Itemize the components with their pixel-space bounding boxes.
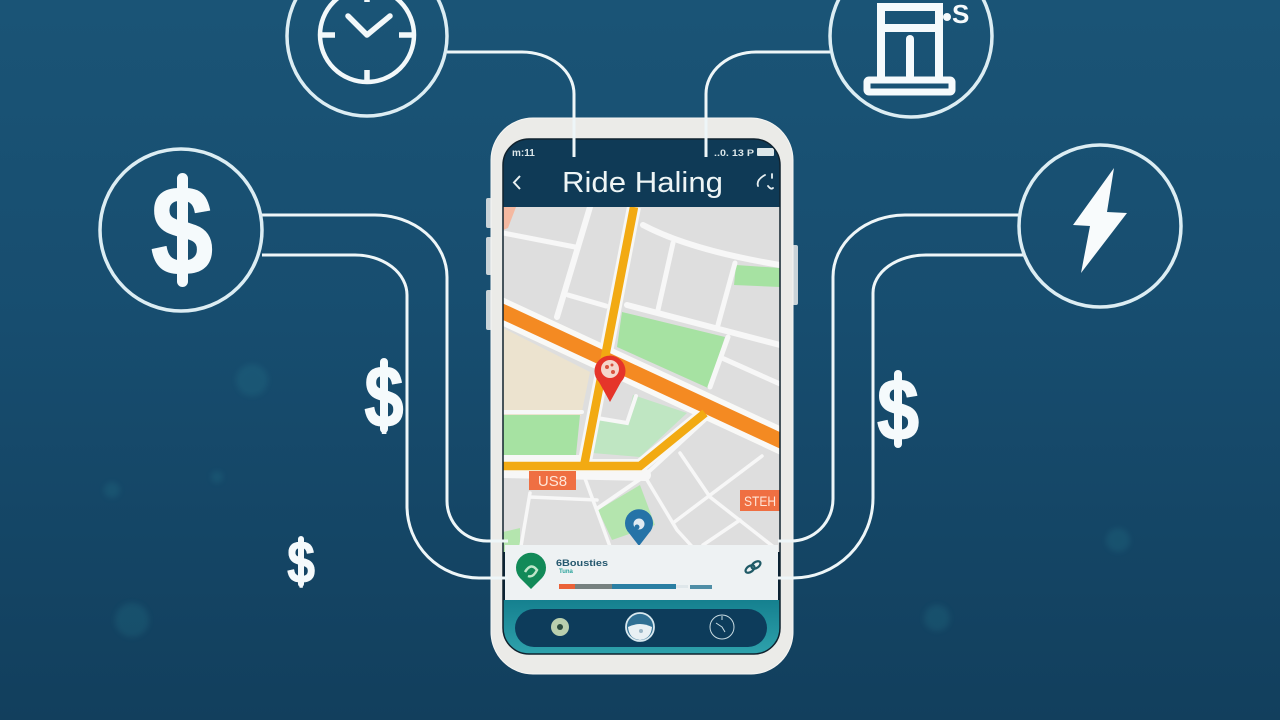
card subtitle: Tuna xyxy=(559,569,574,575)
map xyxy=(495,207,790,552)
beige block xyxy=(503,328,590,416)
connector: clock to phone xyxy=(447,52,574,157)
status bar left: m:11 xyxy=(512,148,535,159)
floating dollar left small: $ xyxy=(287,529,315,596)
status bar right: ..0. 13 P xyxy=(714,148,754,158)
yellow route casing xyxy=(503,207,705,466)
app title: Ride Haling xyxy=(562,167,723,199)
icon: nav left xyxy=(551,618,569,636)
info card xyxy=(505,545,778,605)
status bar right xyxy=(714,148,774,156)
phone xyxy=(486,118,798,674)
connector: bolt outer xyxy=(778,215,1020,541)
icon: nav center xyxy=(626,613,654,641)
street label left xyxy=(529,471,576,490)
icon: nav right xyxy=(710,615,734,639)
phone side buttons xyxy=(486,198,798,330)
green parks xyxy=(503,207,780,552)
icon: red map pin xyxy=(594,356,626,402)
icon: blue map pin xyxy=(625,509,653,546)
icon: dollar circle xyxy=(100,149,262,311)
icon: lightning bolt circle xyxy=(1019,145,1181,307)
screen edge xyxy=(503,139,780,654)
white streets xyxy=(503,207,780,552)
card title: 6Bousties xyxy=(556,558,608,569)
yellow route xyxy=(503,207,705,466)
orange main road xyxy=(495,308,790,445)
bottom navigation xyxy=(503,600,780,656)
icon: dollar circle: $ xyxy=(151,159,213,303)
phone screen xyxy=(495,137,790,656)
connector lines xyxy=(262,52,1025,578)
connector: dollar outer xyxy=(262,215,508,541)
street label right xyxy=(740,490,780,511)
app header xyxy=(503,139,780,207)
icon: clock xyxy=(287,0,447,116)
connector: fare tower to phone xyxy=(706,52,830,157)
floating dollar left large: $ xyxy=(364,348,404,446)
icon: back chevron xyxy=(514,176,520,189)
connector: dollar inner xyxy=(262,255,508,578)
icon: fare tower xyxy=(830,0,992,117)
icon: header action xyxy=(758,174,773,189)
icon: link xyxy=(744,560,762,574)
street label left: US8 xyxy=(538,473,567,490)
phone body xyxy=(491,118,793,674)
progress bar xyxy=(559,584,712,589)
floating dollar right: $ xyxy=(877,361,919,459)
icon: green pin xyxy=(516,553,546,589)
street label right: STEH xyxy=(744,493,776,509)
connector: bolt inner xyxy=(778,255,1025,578)
